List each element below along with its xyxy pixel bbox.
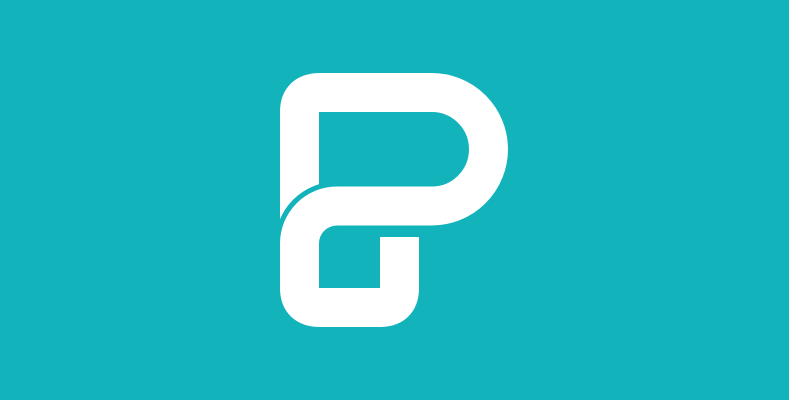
upper P stem and bowl	[300, 92, 488, 225]
lower loop	[300, 206, 400, 308]
lower loop gap border	[300, 206, 400, 308]
logo mark	[300, 92, 488, 308]
